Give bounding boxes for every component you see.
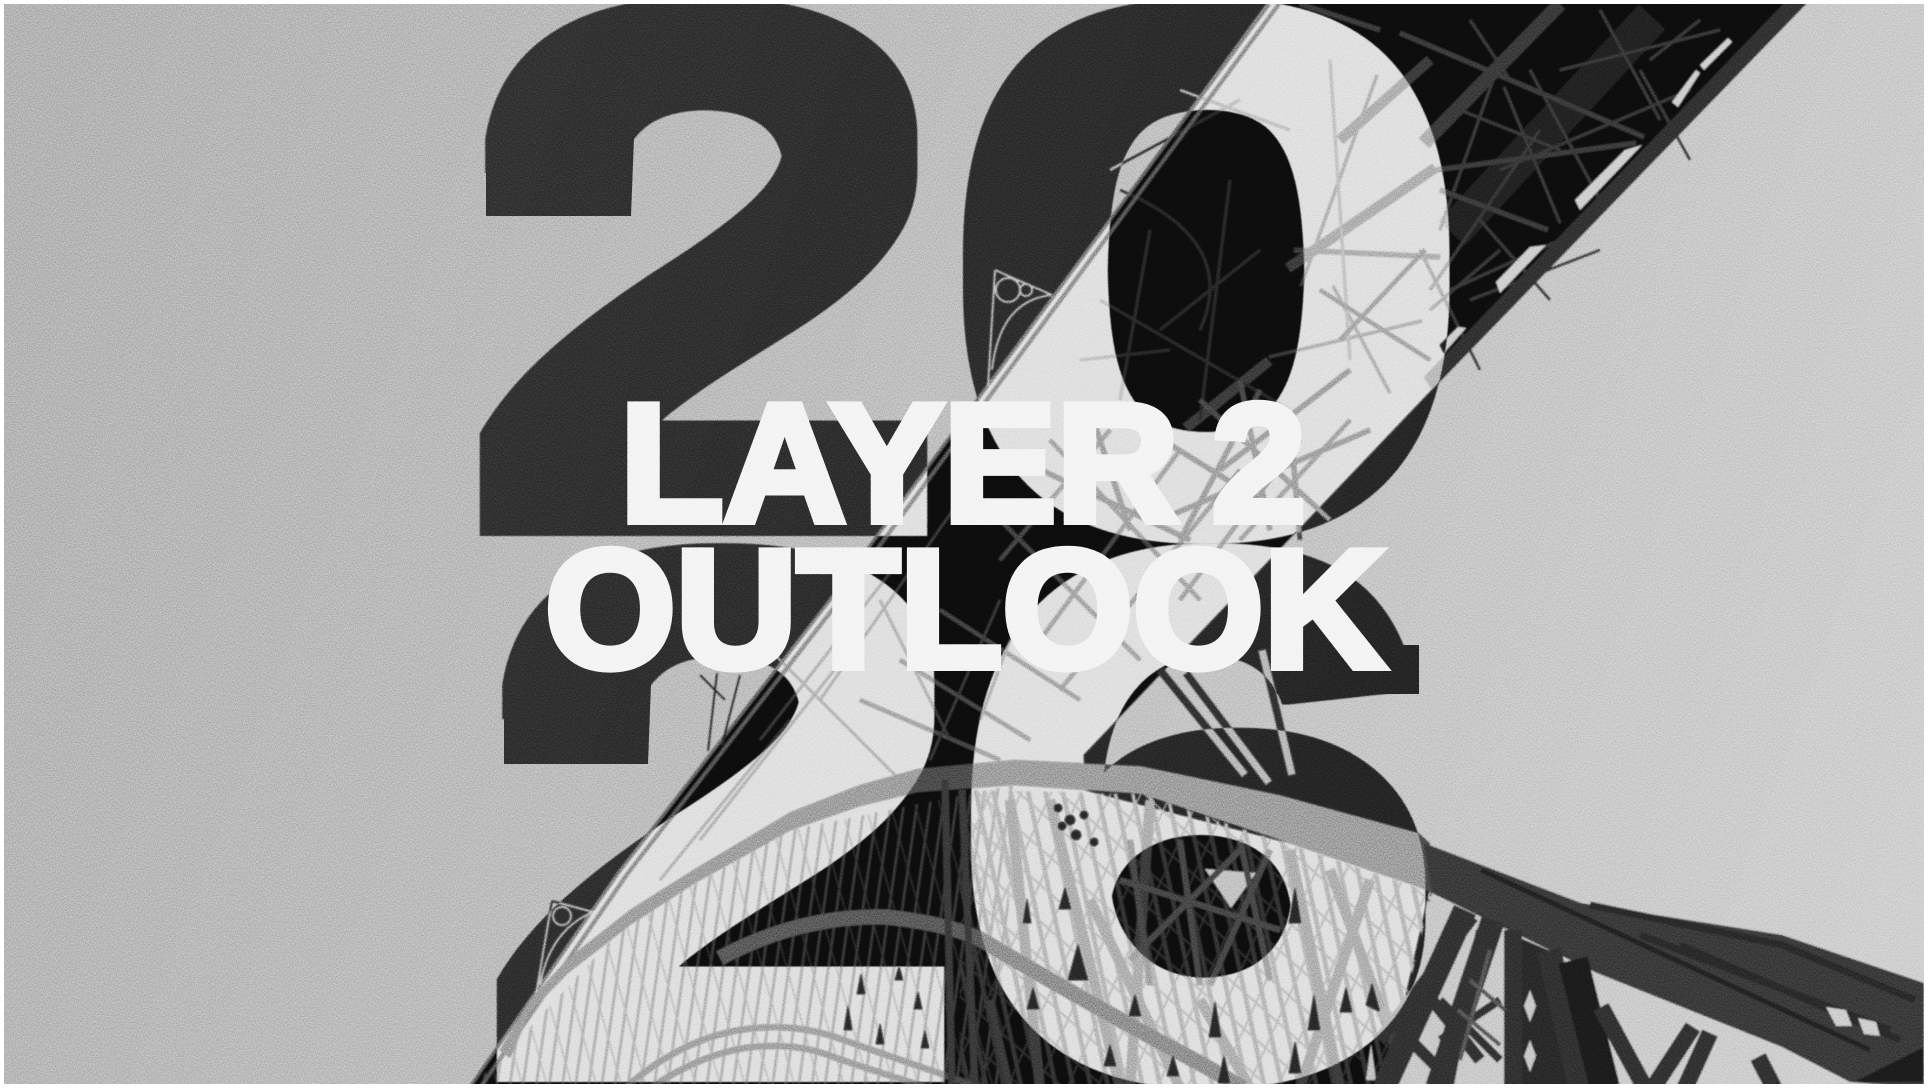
dark lattice inside lower counter of six (1120, 840, 1280, 985)
title: Layer 2 Outlook (545, 369, 1385, 703)
right edge chord and sky slits (1424, 0, 1810, 390)
bottom arch (625, 1027, 982, 1088)
fan of heavy members below the arch (1010, 800, 1400, 1088)
upper truss members (660, 4, 1720, 880)
second inner chord (720, 917, 1243, 1088)
spandrel brackets on the sky side (536, 270, 1052, 994)
title line 1: LAYER 2 (620, 369, 1306, 557)
right lower truss: legs (1380, 910, 1774, 1088)
bridge silhouette (469, 0, 1810, 1088)
title line 2: OUTLOOK (545, 515, 1385, 703)
central columns (945, 780, 1010, 1088)
left edge chord of the upper truss (469, 4, 1279, 1088)
legs crossing the sky gap (1160, 650, 1292, 783)
right lower truss: main chord (1424, 843, 1924, 1088)
sky slivers in the lower lattice (844, 804, 1380, 1083)
arch chord (500, 760, 1432, 1058)
year numerals 2026, inverted photo showing through (451, 0, 1488, 1088)
lattice texture, lower bridge (469, 785, 1432, 1088)
